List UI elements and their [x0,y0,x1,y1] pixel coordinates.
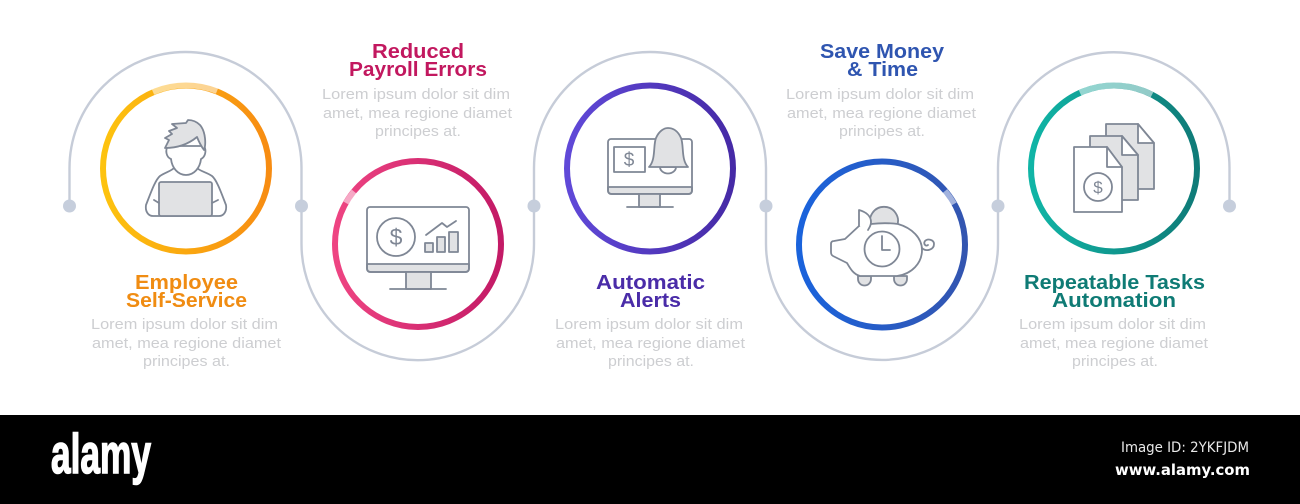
panel: automatic alerts [555,86,745,370]
website: www.alamy.com [1115,461,1250,479]
heading: & Time [847,59,918,81]
icon: person with laptop [146,120,226,216]
icon: monitor with dollar and chart [367,207,469,289]
icon: piggy bank with clock [831,207,934,286]
ring: blue [799,162,965,328]
heading [820,41,945,81]
heading [349,41,487,81]
body text [786,87,976,140]
connector line with nodes [63,52,1236,360]
body text: amet, mea regione diamet [556,336,745,352]
heading: Save Money [820,41,945,63]
body text: amet, mea regione diamet [787,106,976,122]
body text: Lorem ipsum dolor sit dim [1019,317,1206,333]
logo: alamy: alamy [51,422,151,485]
body text: principes at. [1072,354,1158,370]
panel: repeatable tasks automation [1019,86,1208,370]
heading: Self-Service [126,290,247,312]
body text [322,87,512,140]
icon glyph: dollar: $ [624,150,635,171]
body text: amet, mea regione diamet [92,336,281,352]
body text [555,317,745,370]
icon glyph: dollar: $ [1093,178,1103,197]
body text: Lorem ipsum dolor sit dim [91,317,278,333]
icon: monitor with bell [608,128,692,207]
heading [596,272,705,312]
body text: principes at. [375,124,461,140]
ring: pink [335,161,501,327]
footer bar [0,415,1300,504]
heading: Employee [135,272,238,294]
body text: amet, mea regione diamet [1020,336,1208,352]
body text: principes at. [608,354,694,370]
body text: principes at. [839,124,925,140]
panel: employee self-service [91,85,281,370]
ring: yellow [103,86,269,252]
heading: Automatic [596,272,705,294]
panel: reduced payroll errors [322,41,512,327]
heading: Payroll Errors [349,59,487,81]
heading: Alerts [620,290,681,312]
ring: teal [1031,86,1197,252]
body text [91,317,281,370]
heading: Repeatable Tasks [1024,272,1205,294]
heading [1024,272,1205,312]
icon glyph: dollar: $ [390,224,403,250]
ring: indigo [567,86,733,252]
body text: Lorem ipsum dolor sit dim [555,317,743,333]
panel: save money and time [786,41,976,328]
body text: Lorem ipsum dolor sit dim [786,87,974,103]
heading: Automation [1052,290,1176,312]
heading: Reduced [372,41,464,63]
image id: Image ID: 2YKFJDM [1121,440,1249,456]
body text: amet, mea regione diamet [323,106,512,122]
heading [126,272,247,312]
icon: stacked documents [1074,124,1154,212]
body text [1019,317,1208,370]
body text: Lorem ipsum dolor sit dim [322,87,510,103]
body text: principes at. [143,354,230,370]
